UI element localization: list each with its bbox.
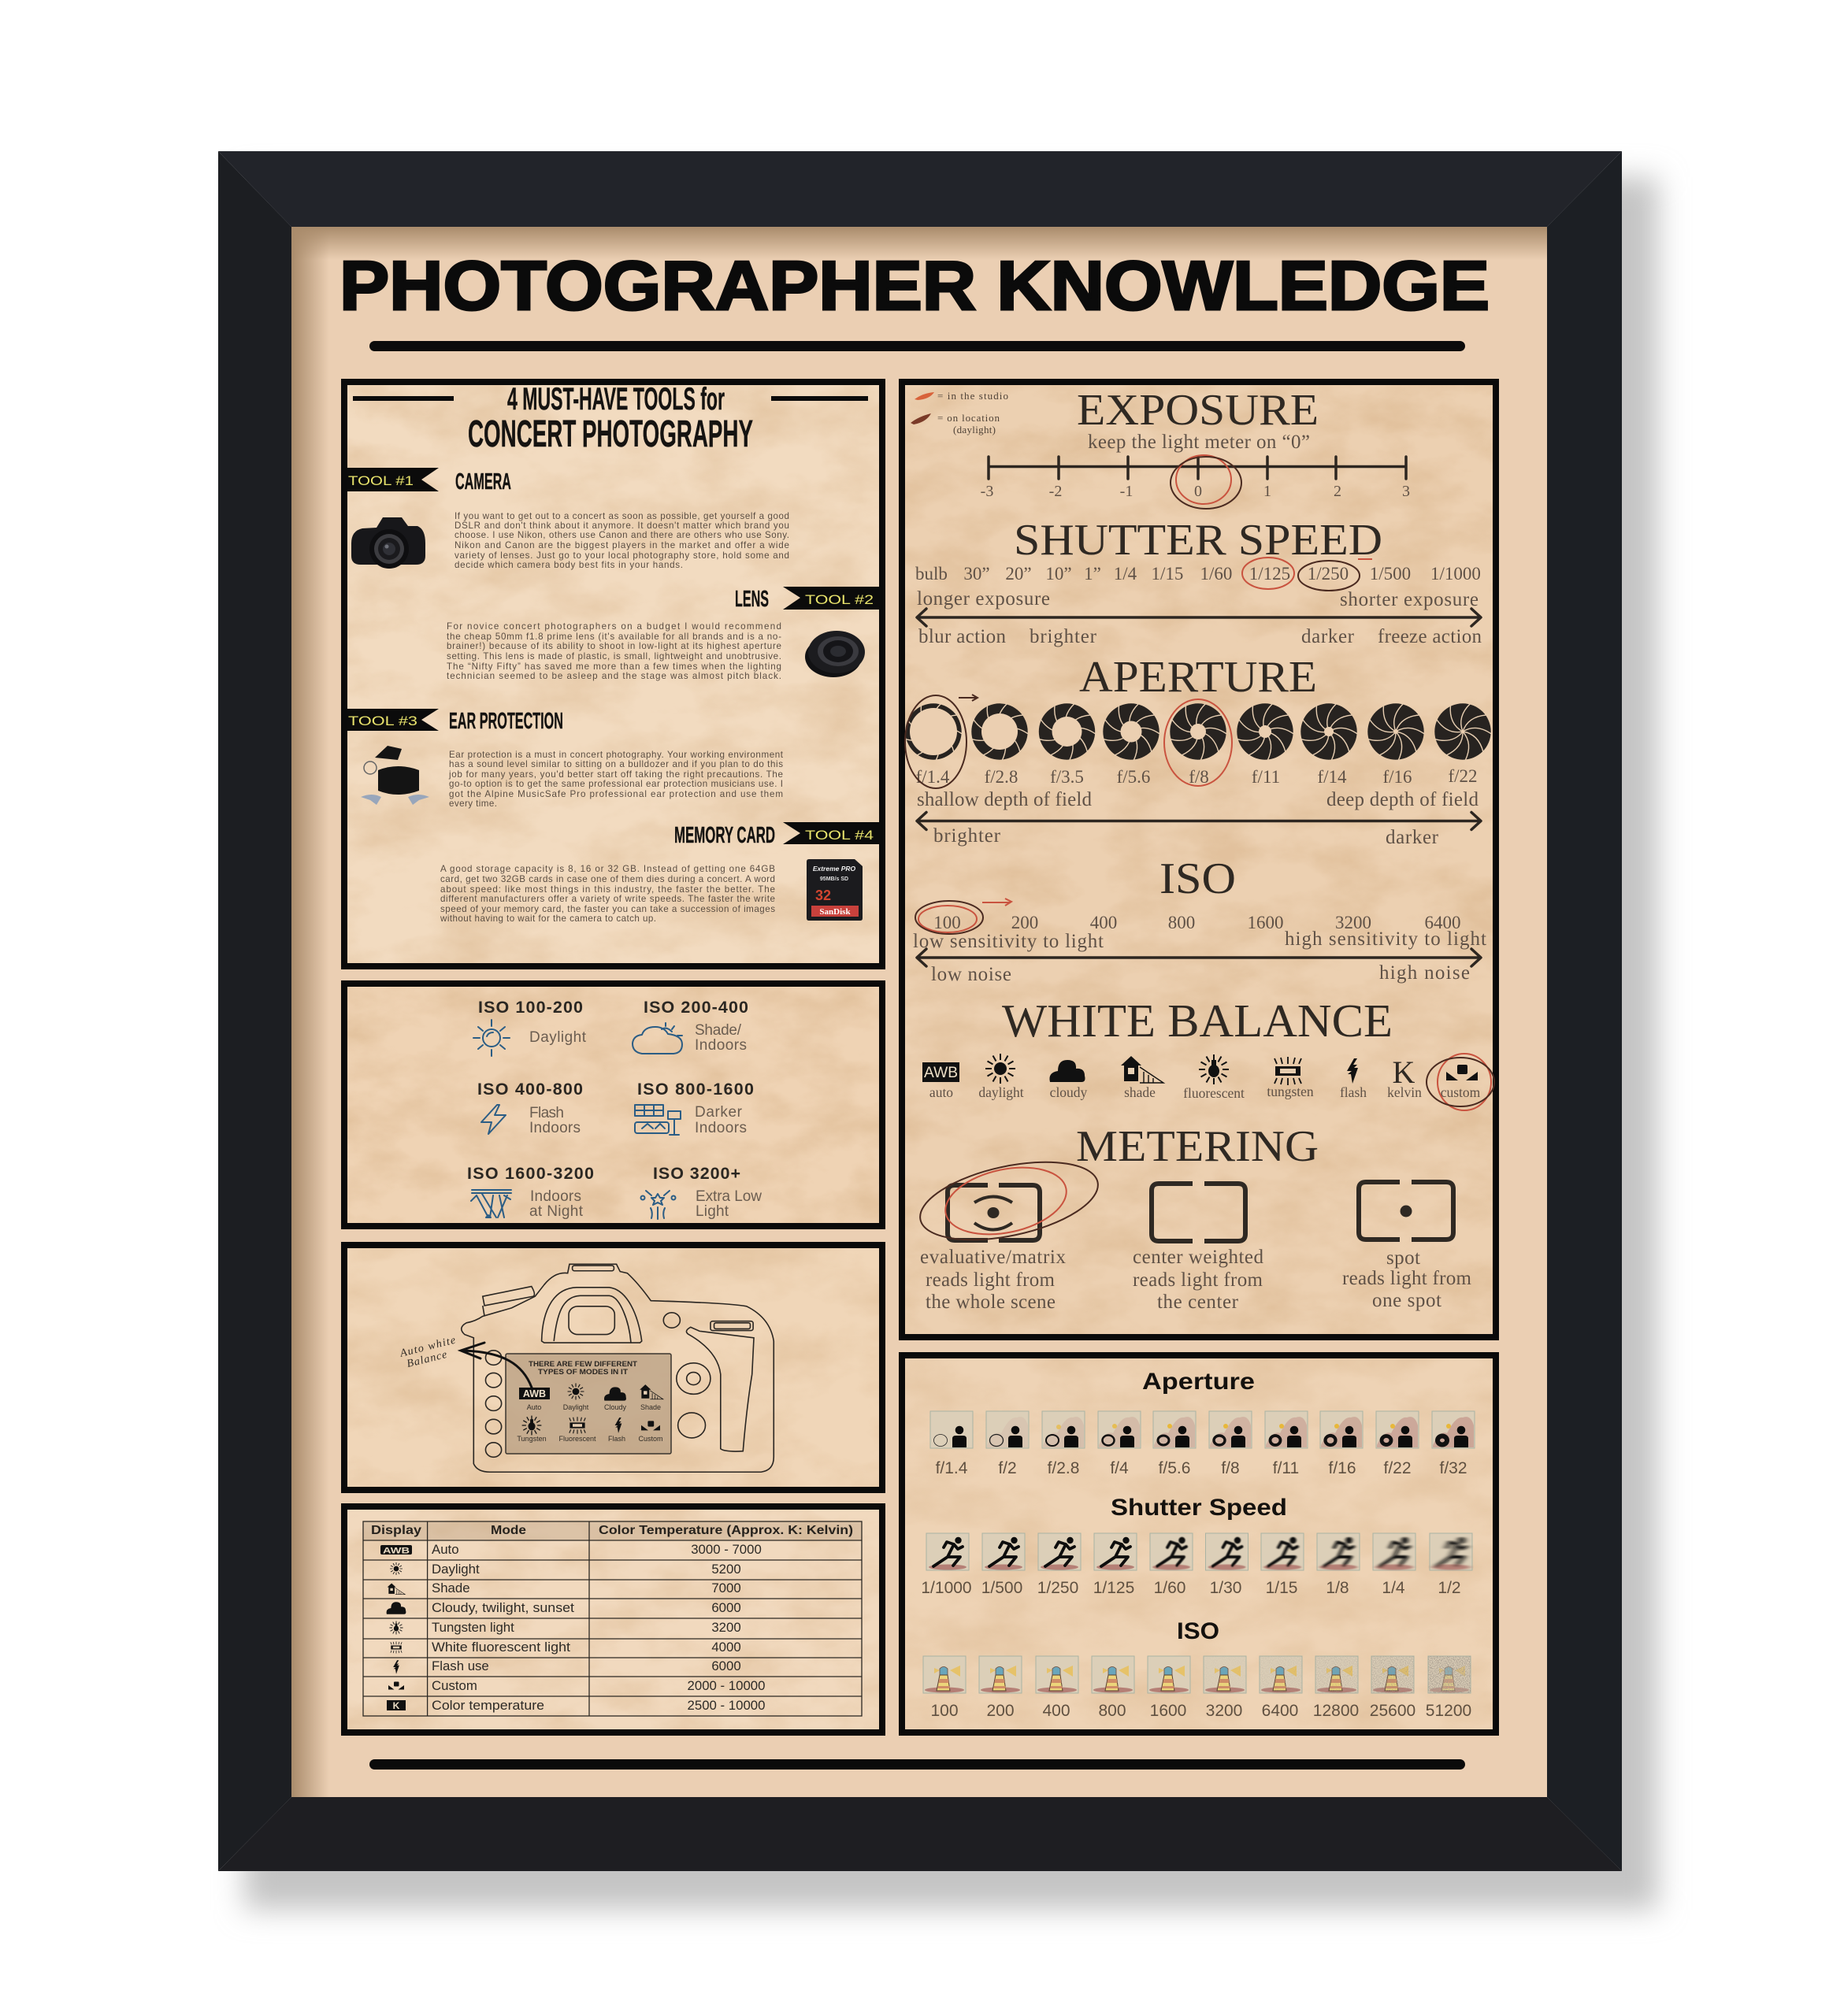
tool 4 memory card: MEMORY CARD <box>674 823 775 848</box>
ISO section: ISO <box>1159 854 1236 903</box>
tool 3 ear protection: TOOL #3 <box>348 713 417 728</box>
icon: SD card: 95MB/s SD <box>820 876 848 882</box>
tool 4 memory card: different manufacturers offer a variety of write speeds. The faster the write <box>440 894 775 904</box>
white balance labels: cloudy <box>1050 1084 1088 1100</box>
white balance section <box>922 995 1494 1110</box>
shutter labels: 1/30 <box>1210 1579 1241 1597</box>
label: auto white balance: Balance <box>406 1349 448 1370</box>
shutter values: 1/500 <box>1370 564 1411 584</box>
shutter values: 20” <box>1005 564 1032 584</box>
tool 2 lens: For novice concert photographers on a budget I would recommend <box>447 621 781 632</box>
ISO 400-800 flash indoors: ISO 400-800 <box>477 1080 583 1099</box>
arrow: shutter scale <box>917 609 1481 626</box>
hand circles on ISO 100 <box>915 899 1011 934</box>
aperture section: deep depth of field <box>1326 789 1479 810</box>
tool 4 memory card: about speed: like most things in this industry, the faster the better. The <box>440 884 775 895</box>
tool 4 memory card <box>440 822 880 924</box>
shutter values <box>915 564 1481 584</box>
tool 3 ear protection <box>347 709 784 809</box>
tool 1 camera: variety of lenses. Just go to your local photography store, hold some and <box>455 550 789 561</box>
legend <box>911 390 1008 435</box>
table color temperature column: 3000 - 7000 <box>691 1542 762 1557</box>
ISO section: low noise <box>931 964 1011 985</box>
metering captions: reads light from <box>926 1269 1056 1291</box>
ISO labels <box>930 1702 1471 1720</box>
shutter labels: 1/4 <box>1382 1579 1405 1597</box>
camera screen with white balance modes: Tungsten <box>517 1435 547 1443</box>
ISO 1600-3200 indoors at night: ISO 1600-3200 <box>467 1164 594 1183</box>
meter labels <box>981 483 1410 500</box>
aperture labels: f/5.6 <box>1159 1459 1190 1477</box>
metering captions: spot <box>1386 1247 1420 1269</box>
ISO labels: 6400 <box>1262 1702 1298 1720</box>
arrow: aperture scale <box>917 813 1481 830</box>
tool 2 lens: LENS <box>735 587 769 612</box>
aperture section <box>905 653 1492 848</box>
table icons column: AWB <box>383 1547 410 1556</box>
icon: room <box>635 1105 681 1135</box>
ISO 800-1600 darker indoors: ISO 800-1600 <box>637 1080 754 1099</box>
shutter thumbnails <box>926 1533 1472 1570</box>
ISO values: 6400 <box>1424 913 1460 932</box>
meter labels: 0 <box>1194 483 1202 500</box>
tool 1 camera: TOOL #1 <box>348 473 414 488</box>
arrow: auto white balance pointer <box>461 1343 532 1388</box>
ISO values: 100 <box>933 913 961 932</box>
ISO section: low sensitivity to light <box>913 931 1104 952</box>
table color temperature column: 5200 <box>711 1562 741 1577</box>
metering captions: evaluative/matrix <box>920 1247 1067 1268</box>
white balance labels: daylight <box>978 1084 1024 1100</box>
camera screen with white balance modes <box>506 1354 671 1454</box>
header decorative bars and heading: 4 MUST-HAVE TOOLS for <box>507 382 725 417</box>
hand circles on evaluative <box>913 1148 1105 1254</box>
ISO section: high noise <box>1379 962 1470 984</box>
ISO thumbnails <box>923 1656 1471 1693</box>
legend: = in the studio <box>937 390 1008 402</box>
meter labels: -1 <box>1120 483 1133 500</box>
table icons column <box>380 1545 412 1711</box>
aperture labels: f/32 <box>1439 1459 1467 1477</box>
shutter values: 1/250 <box>1308 564 1349 584</box>
panel: visual effect charts <box>902 1355 1496 1732</box>
shutter labels: 1/2 <box>1438 1579 1461 1597</box>
tool 2 lens: TOOL #2 <box>805 592 874 607</box>
panel: ISO by lighting situation <box>344 984 882 1226</box>
poster mat background <box>291 227 1547 1797</box>
ISO labels: 400 <box>1042 1702 1070 1720</box>
metering section: METERING <box>1076 1122 1319 1171</box>
legend: (daylight) <box>953 424 996 435</box>
shutter speed section: darker <box>1301 626 1355 647</box>
f-stop labels: f/8 <box>1189 767 1209 787</box>
shutter speed section: longer exposure <box>917 588 1050 610</box>
white balance labels: tungsten <box>1267 1084 1314 1099</box>
panel: white balance table <box>344 1506 882 1732</box>
camera outline <box>462 1264 774 1472</box>
hand circles on zero <box>1171 455 1241 509</box>
table icons column: K <box>393 1700 400 1711</box>
ISO 400-800 flash indoors <box>477 1080 583 1136</box>
white balance labels: flash <box>1340 1084 1367 1100</box>
white balance labels: custom <box>1441 1084 1481 1100</box>
tool 1 camera: decide which camera body best fits in your hands. <box>455 560 683 570</box>
shutter labels: 1/8 <box>1326 1579 1349 1597</box>
shutter labels: 1/125 <box>1093 1579 1134 1597</box>
hand circles on custom <box>1427 1054 1494 1110</box>
ISO 800-1600 darker indoors <box>635 1080 754 1136</box>
tool 3 ear protection: go-to option is to get the same professional ear protection musicians use. I <box>449 779 783 789</box>
ISO values: 200 <box>1011 913 1038 932</box>
icon: evaluative metering <box>948 1185 1040 1240</box>
ISO labels: 100 <box>930 1702 959 1720</box>
icon: SD card <box>807 859 863 921</box>
table color temperature column: 6000 <box>711 1600 741 1615</box>
meter labels: -3 <box>981 483 993 500</box>
shutter speed section: brighter <box>1030 626 1097 647</box>
icon: camera <box>351 517 425 569</box>
white balance labels <box>929 1084 1481 1101</box>
f-stop labels: f/11 <box>1252 767 1280 787</box>
tool 4 memory card: card, get two 32GB cards in case one of them dies during a concert. A word <box>440 874 775 884</box>
tool 3 ear protection: has a sound level similar to sitting on a bulldozer and if you plan to do this <box>449 759 783 769</box>
metering captions: reads light from <box>1342 1268 1472 1289</box>
camera screen with white balance modes: Auto <box>527 1403 541 1411</box>
aperture labels <box>936 1459 1467 1477</box>
aperture labels: f/4 <box>1110 1459 1129 1477</box>
ISO 200-400 shade indoors <box>633 998 748 1054</box>
header decorative bars and heading: CONCERT PHOTOGRAPHY <box>468 413 753 455</box>
meter labels: 3 <box>1402 483 1410 500</box>
title: PHOTOGRAPHER KNOWLEDGE <box>339 246 1490 324</box>
shutter labels: 1/60 <box>1154 1579 1185 1597</box>
meter labels: -2 <box>1049 483 1062 500</box>
tool 2 lens <box>447 587 880 681</box>
tool 1 camera: CAMERA <box>455 469 511 495</box>
panel: camera back diagram <box>344 1245 882 1490</box>
metering captions: the whole scene <box>926 1292 1056 1313</box>
aperture labels: f/8 <box>1221 1459 1240 1477</box>
camera screen with white balance modes: Flash <box>608 1435 625 1443</box>
ISO labels: 12800 <box>1313 1702 1359 1720</box>
tool 1 camera <box>347 468 789 570</box>
ISO labels: 1600 <box>1150 1702 1186 1720</box>
camera screen with white balance modes: THERE ARE FEW DIFFERENT <box>529 1360 637 1369</box>
tool 4 memory card: A good storage capacity is 8, 16 or 32 GB. Instead of getting one 64GB <box>440 864 775 874</box>
shutter speed section: freeze action <box>1378 626 1482 647</box>
aperture labels: f/2.8 <box>1048 1459 1079 1477</box>
table mode column: Custom <box>432 1678 477 1693</box>
shutter labels: 1/15 <box>1266 1579 1297 1597</box>
icon: fireworks <box>641 1191 676 1219</box>
hand circles on shutter values <box>1242 558 1372 591</box>
ISO 3200+ extra low light: Extra Low <box>696 1188 762 1205</box>
table grid <box>363 1521 862 1716</box>
exposure section: keep the light meter on “0” <box>1088 432 1310 453</box>
ISO values: 1600 <box>1248 913 1284 932</box>
ISO section: high sensitivity to light <box>1285 928 1486 950</box>
iris icons <box>905 703 1492 761</box>
f-stop labels: f/5.6 <box>1117 767 1150 787</box>
icon: spot metering <box>1359 1182 1453 1240</box>
tool 3 ear protection: EAR PROTECTION <box>449 709 563 734</box>
table mode column: Cloudy, twilight, sunset <box>432 1600 574 1615</box>
shutter values: 1/4 <box>1114 564 1137 584</box>
f-stop labels: f/3.5 <box>1050 767 1084 787</box>
f-stop labels <box>916 766 1478 787</box>
ISO 200-400 shade indoors: ISO 200-400 <box>644 998 748 1017</box>
tool 2 lens: the cheap 50mm f1.8 prime lens (it's available for all brands and is a no- <box>447 632 781 642</box>
shutter values: 1/15 <box>1152 564 1183 584</box>
ISO 400-800 flash indoors: Flash <box>529 1105 564 1121</box>
ISO 800-1600 darker indoors: Indoors <box>695 1120 747 1136</box>
shutter values: bulb <box>915 564 948 584</box>
legend: = on location <box>937 412 1000 424</box>
aperture section: APERTURE <box>1079 653 1317 702</box>
hand circles on aperture <box>905 695 1232 788</box>
ISO section <box>913 854 1486 985</box>
table mode column <box>432 1542 574 1713</box>
arrow: ISO scale <box>917 949 1481 966</box>
white balance labels: fluorescent <box>1183 1085 1245 1101</box>
meter labels: 1 <box>1263 483 1271 500</box>
camera screen with white balance modes: Custom <box>638 1435 663 1443</box>
tool 2 lens: The “Nifty Fifty” has saved me more than a few times when the lighting <box>447 662 781 672</box>
table mode column: Shade <box>432 1581 470 1595</box>
f-stop labels: f/2.8 <box>985 767 1018 787</box>
shutter labels: 1/1000 <box>921 1579 972 1597</box>
camera screen with white balance modes: Shade <box>640 1403 661 1411</box>
shutter speed section: shorter exposure <box>1340 589 1479 610</box>
header decorative bars and heading <box>353 382 868 455</box>
table color temperature column: 2000 - 10000 <box>688 1678 765 1693</box>
tool 4 memory card: speed of your memory card, the faster you can take a succession of images <box>440 904 775 914</box>
ISO labels: 200 <box>986 1702 1015 1720</box>
table color temperature column: 6000 <box>711 1658 741 1673</box>
shutter labels <box>921 1579 1461 1597</box>
table color temperature column <box>688 1542 765 1713</box>
ISO 1600-3200 indoors at night: at Night <box>529 1203 584 1220</box>
aperture section: darker <box>1386 827 1439 848</box>
shutter speed heading: Shutter Speed <box>1111 1495 1287 1521</box>
panel: concert photography tools <box>344 382 882 966</box>
f-stop labels: f/14 <box>1317 767 1347 787</box>
tool 1 camera: Nikon and Canon are the biggest players in the market and offer a wide <box>455 540 789 550</box>
aperture labels: f/2 <box>998 1459 1017 1477</box>
shutter values: 1/125 <box>1249 564 1290 584</box>
icon: SD card: 32 <box>815 888 831 903</box>
meter labels: 2 <box>1334 483 1341 500</box>
tool 4 memory card: TOOL #4 <box>805 828 874 843</box>
label: auto white balance: Auto white <box>398 1335 457 1360</box>
icon: cloud with sun <box>633 1023 682 1054</box>
shutter speed section: blur action <box>918 626 1007 647</box>
icon: SD card: SanDisk <box>819 907 851 917</box>
icon: lightning <box>481 1105 506 1134</box>
icon: ear protection case <box>361 746 429 805</box>
ISO 100-200 daylight <box>473 998 587 1056</box>
table mode column: Color temperature <box>432 1698 544 1713</box>
camera screen with white balance modes: AWB <box>523 1388 546 1399</box>
ISO 100-200 daylight: ISO 100-200 <box>478 998 583 1017</box>
icon: center weighted metering <box>1152 1184 1245 1241</box>
ISO values: 800 <box>1168 913 1195 932</box>
metering section <box>913 1122 1472 1313</box>
ISO 3200+ extra low light: Light <box>696 1203 729 1220</box>
table color temperature column: 4000 <box>711 1640 741 1655</box>
shutter values: 1/60 <box>1200 564 1232 584</box>
ISO 800-1600 darker indoors: Darker <box>695 1104 743 1121</box>
ISO 1600-3200 indoors at night: Indoors <box>530 1188 581 1205</box>
shutter values: 1/1000 <box>1430 564 1481 584</box>
white balance labels: shade <box>1124 1084 1156 1100</box>
bottom rule <box>369 1759 1465 1770</box>
white balance section: WHITE BALANCE <box>1002 995 1393 1047</box>
shutter values: 10” <box>1045 564 1072 584</box>
f-stop labels: f/22 <box>1448 766 1478 786</box>
shutter labels: 1/500 <box>981 1579 1022 1597</box>
exposure section: EXPOSURE <box>1077 386 1319 435</box>
white balance labels: kelvin <box>1387 1084 1422 1100</box>
icon: lens <box>805 631 865 677</box>
icon: sun <box>473 1020 510 1056</box>
aperture section: shallow depth of field <box>917 789 1092 810</box>
tool 4 memory card: without having to wait for the camera to catch up. <box>440 914 656 924</box>
metering captions: the center <box>1157 1292 1239 1313</box>
tool 1 camera: choose. I use Nikon, others use Canon and there are others who use Sony. <box>455 530 789 540</box>
tool 3 ear protection: Ear protection is a must in concert photography. Your working environment <box>449 750 784 760</box>
ISO heading: ISO <box>1177 1618 1219 1644</box>
tool 1 camera: DSLR and don't think about it anymore. It doesn't matter which brand you <box>455 521 789 531</box>
f-stop labels: f/16 <box>1382 767 1412 787</box>
exposure section <box>981 386 1410 509</box>
ISO values: 400 <box>1090 913 1117 932</box>
ISO 100-200 daylight: Daylight <box>529 1029 587 1046</box>
label: auto white balance <box>398 1335 460 1372</box>
white balance icons: K <box>1393 1054 1415 1090</box>
ISO values: 3200 <box>1335 913 1371 932</box>
ISO labels: 25600 <box>1370 1702 1415 1720</box>
f-stop labels: f/1.4 <box>916 767 950 787</box>
tool 2 lens: technician seemed to be asleep and the stage was almost pitch black. <box>447 671 781 681</box>
panel: exposure triangle cheat sheet <box>902 382 1496 1337</box>
shutter speed section <box>915 516 1482 647</box>
shutter speed section: SHUTTER SPEED <box>1014 516 1382 565</box>
table mode column: White fluorescent light <box>432 1640 570 1655</box>
aperture heading: Aperture <box>1142 1369 1255 1395</box>
table header: Mode <box>491 1524 526 1537</box>
shutter values: 1” <box>1084 564 1101 584</box>
metering captions: center weighted <box>1133 1247 1263 1268</box>
camera screen with white balance modes: Cloudy <box>604 1403 627 1411</box>
icon: stage lights <box>471 1190 511 1217</box>
metering captions: reads light from <box>1133 1269 1263 1291</box>
ISO labels: 3200 <box>1206 1702 1242 1720</box>
camera screen with white balance modes: Fluorescent <box>558 1435 596 1443</box>
aperture labels: f/22 <box>1383 1459 1412 1477</box>
table header: Display <box>371 1524 421 1537</box>
picture frame <box>218 151 1622 1871</box>
table color temperature column: 3200 <box>711 1620 741 1635</box>
shutter labels: 1/250 <box>1037 1579 1078 1597</box>
metering captions: one spot <box>1372 1290 1441 1311</box>
aperture labels: f/16 <box>1328 1459 1356 1477</box>
tool 3 ear protection: every time. <box>449 799 497 809</box>
icon: SD card: Extreme PRO <box>813 865 856 873</box>
ISO labels: 800 <box>1098 1702 1126 1720</box>
camera screen with white balance modes: TYPES OF MODES IN IT <box>538 1368 628 1377</box>
metering captions <box>920 1247 1472 1313</box>
white balance icons <box>922 1054 1478 1090</box>
table mode column: Flash use <box>432 1658 489 1673</box>
aperture thumbnails <box>930 1411 1475 1448</box>
top rule <box>369 341 1465 351</box>
aperture labels: f/1.4 <box>936 1459 968 1477</box>
aperture labels: f/11 <box>1273 1459 1299 1477</box>
white balance labels: auto <box>929 1084 953 1100</box>
tool 2 lens: brainer!) because of its ability to shoot in low-light at its highest aperture <box>447 641 781 651</box>
table mode column: Daylight <box>432 1562 480 1577</box>
ISO 200-400 shade indoors: Indoors <box>695 1037 747 1054</box>
table mode column: Tungsten light <box>432 1620 514 1635</box>
aperture section: brighter <box>933 825 1001 847</box>
table header <box>371 1524 853 1537</box>
tool 3 ear protection: got the Alpine MusicSafe Pro professional ear protection and use them <box>449 789 783 799</box>
tool 1 camera: If you want to get out to a concert as soon as possible, get yourself a good <box>455 511 789 521</box>
table color temperature column: 2500 - 10000 <box>688 1698 765 1713</box>
frame drop shadow <box>244 177 1658 1910</box>
white balance icons: AWB <box>924 1065 958 1081</box>
ISO 1600-3200 indoors at night <box>467 1164 594 1220</box>
ISO 200-400 shade indoors: Shade/ <box>695 1022 742 1039</box>
ISO 3200+ extra low light: ISO 3200+ <box>653 1164 740 1183</box>
ISO values <box>933 913 1460 932</box>
ISO labels: 51200 <box>1426 1702 1471 1720</box>
table color temperature column: 7000 <box>711 1581 741 1595</box>
tool 3 ear protection: job for many years, you'd better start off taking the right precautions. The <box>448 769 783 780</box>
tool 2 lens: setting. This lens is made of plastic, is small, lightweight and unobtrusive. <box>447 651 781 662</box>
table header: Color Temperature (Approx. K: Kelvin) <box>599 1524 853 1537</box>
light meter scale <box>989 457 1406 479</box>
ISO 3200+ extra low light <box>641 1164 762 1220</box>
shutter values: 30” <box>963 564 990 584</box>
table mode column: Auto <box>432 1542 459 1557</box>
camera screen with white balance modes: Daylight <box>563 1403 589 1411</box>
ISO 400-800 flash indoors: Indoors <box>529 1120 581 1136</box>
